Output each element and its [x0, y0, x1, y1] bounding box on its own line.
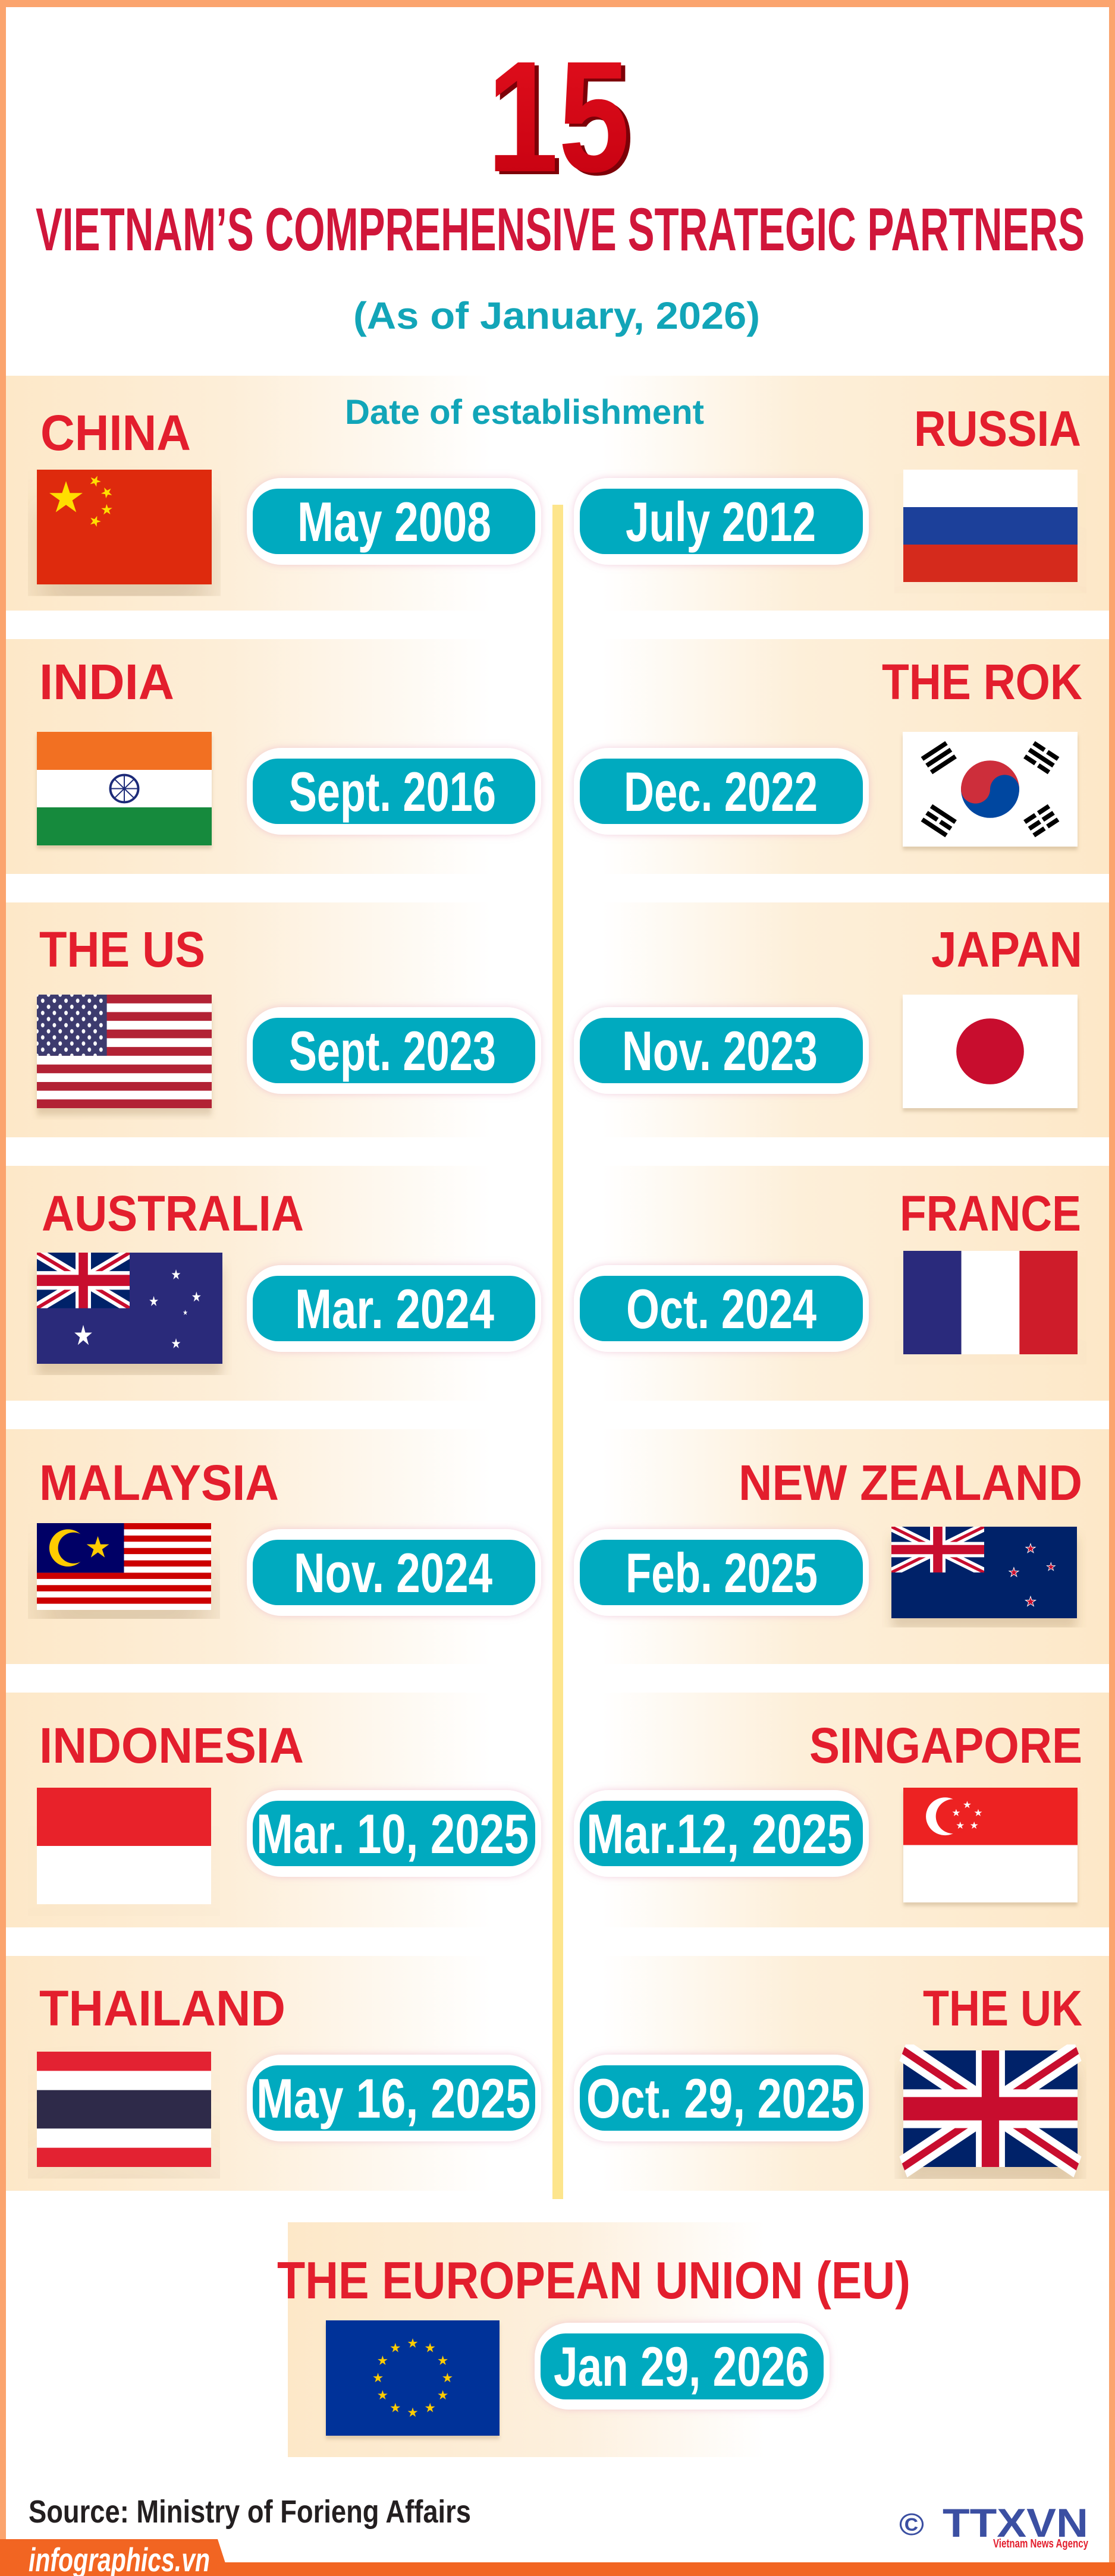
date pill: Dec. 2022 — [574, 748, 869, 835]
source note: Source: Ministry of Forieng Affairs — [29, 2494, 471, 2530]
label: THE UK: THE UK — [923, 1980, 1082, 2036]
date pill: Mar. 10, 2025 — [247, 1790, 541, 1877]
row 2: India / ROK — [37, 654, 1082, 847]
flag: United Kingdom — [894, 2045, 1086, 2179]
panel: European Union — [277, 2222, 910, 2457]
footer bar — [0, 2539, 1115, 2576]
logo: TTXVN: TTXVN — [943, 2500, 1088, 2546]
flag: France — [903, 1251, 1078, 1354]
date pill: Nov. 2024: Nov. 2024 — [294, 1542, 492, 1604]
row 5: Malaysia / New Zealand — [37, 1455, 1082, 1618]
row 7: Thailand / UK — [37, 1980, 1082, 2167]
date pill: May 16, 2025 — [247, 2055, 541, 2141]
big number 15: 15 — [487, 29, 630, 205]
flag: Australia — [32, 1253, 228, 1375]
row 6: Indonesia / Singapore — [37, 1718, 1082, 1904]
date pill: Oct. 29, 2025 — [574, 2055, 869, 2141]
flag: United States — [34, 995, 214, 1118]
label: RUSSIA: RUSSIA — [914, 401, 1081, 457]
big number 15: 15 — [491, 32, 634, 208]
label: MALAYSIA: MALAYSIA — [39, 1455, 279, 1511]
date pill: Feb. 2025 — [574, 1529, 869, 1616]
date pill: Sept. 2023: Sept. 2023 — [289, 1020, 496, 1082]
date pill: Dec. 2022: Dec. 2022 — [624, 760, 818, 823]
label: THE EUROPEAN UNION (EU): THE EUROPEAN UNION (EU) — [277, 2251, 910, 2310]
date pill: May 2008: May 2008 — [297, 490, 491, 553]
date pill: Jan 29, 2026: Jan 29, 2026 — [554, 2335, 809, 2398]
flag: Indonesia — [37, 1788, 211, 1904]
row 1: China / Russia — [37, 401, 1081, 584]
label: THE ROK: THE ROK — [882, 654, 1082, 710]
date pill: Nov. 2024 — [247, 1529, 541, 1616]
date pill: Nov. 2023 — [574, 1007, 869, 1094]
label: NEW ZEALAND: NEW ZEALAND — [739, 1455, 1082, 1511]
date of establishment heading: Date of establishment — [345, 393, 704, 432]
label: AUSTRALIA: AUSTRALIA — [42, 1185, 304, 1241]
date pill: Oct. 2024: Oct. 2024 — [626, 1278, 816, 1340]
label: THAILAND: THAILAND — [39, 1980, 285, 2036]
flag: India — [35, 732, 213, 850]
flag: Malaysia — [28, 1523, 220, 1619]
date pill: Mar.12, 2025: Mar.12, 2025 — [586, 1803, 852, 1865]
flag: Thailand — [28, 2052, 220, 2178]
label: THE US: THE US — [39, 921, 205, 977]
date pill: Nov. 2023: Nov. 2023 — [622, 1020, 818, 1082]
row bands — [6, 376, 1109, 2191]
date pill: Sept. 2023 — [247, 1007, 541, 1094]
date pill: Mar. 2024 — [247, 1265, 541, 1352]
flag: China — [28, 470, 221, 596]
flag: Korea — [901, 732, 1079, 851]
date pill: Feb. 2025: Feb. 2025 — [626, 1542, 818, 1604]
flag: New Zealand — [886, 1527, 1082, 1628]
logo: TTXVN — [899, 2500, 1089, 2550]
label: CHINA: CHINA — [40, 405, 191, 461]
flag: Singapore — [902, 1788, 1079, 1907]
date pill: May 16, 2025: May 16, 2025 — [256, 2067, 530, 2130]
date pill: Oct. 29, 2025: Oct. 29, 2025 — [586, 2067, 855, 2130]
row 3: US / Japan — [37, 921, 1082, 1108]
label: FRANCE: FRANCE — [900, 1185, 1081, 1241]
date pill: May 2008 — [247, 478, 541, 565]
label: INDONESIA: INDONESIA — [39, 1718, 304, 1773]
date pill: Jan 29, 2026 — [535, 2323, 830, 2410]
date pill: Sept. 2016: Sept. 2016 — [289, 760, 496, 823]
date pill: July 2012 — [574, 478, 869, 565]
timeline center line — [552, 505, 563, 2199]
date pill: July 2012: July 2012 — [626, 490, 816, 553]
flag: EU — [324, 2320, 501, 2441]
date pill: Mar. 2024: Mar. 2024 — [295, 1278, 494, 1340]
date pill: Oct. 2024 — [574, 1265, 869, 1352]
flag: Russia — [903, 470, 1078, 582]
label: SINGAPORE: SINGAPORE — [809, 1718, 1082, 1773]
flag: Japan — [901, 995, 1079, 1113]
date pill: Mar. 10, 2025: Mar. 10, 2025 — [256, 1803, 529, 1865]
logo: TTXVN: © — [899, 2508, 924, 2542]
row 4: Australia / France — [37, 1185, 1081, 1364]
subtitle: (As of January, 2026) — [353, 294, 760, 337]
date pill: Mar.12, 2025 — [574, 1790, 869, 1877]
label: JAPAN: JAPAN — [931, 921, 1082, 977]
date pill: Sept. 2016 — [247, 748, 541, 835]
label: INDIA: INDIA — [39, 654, 174, 710]
